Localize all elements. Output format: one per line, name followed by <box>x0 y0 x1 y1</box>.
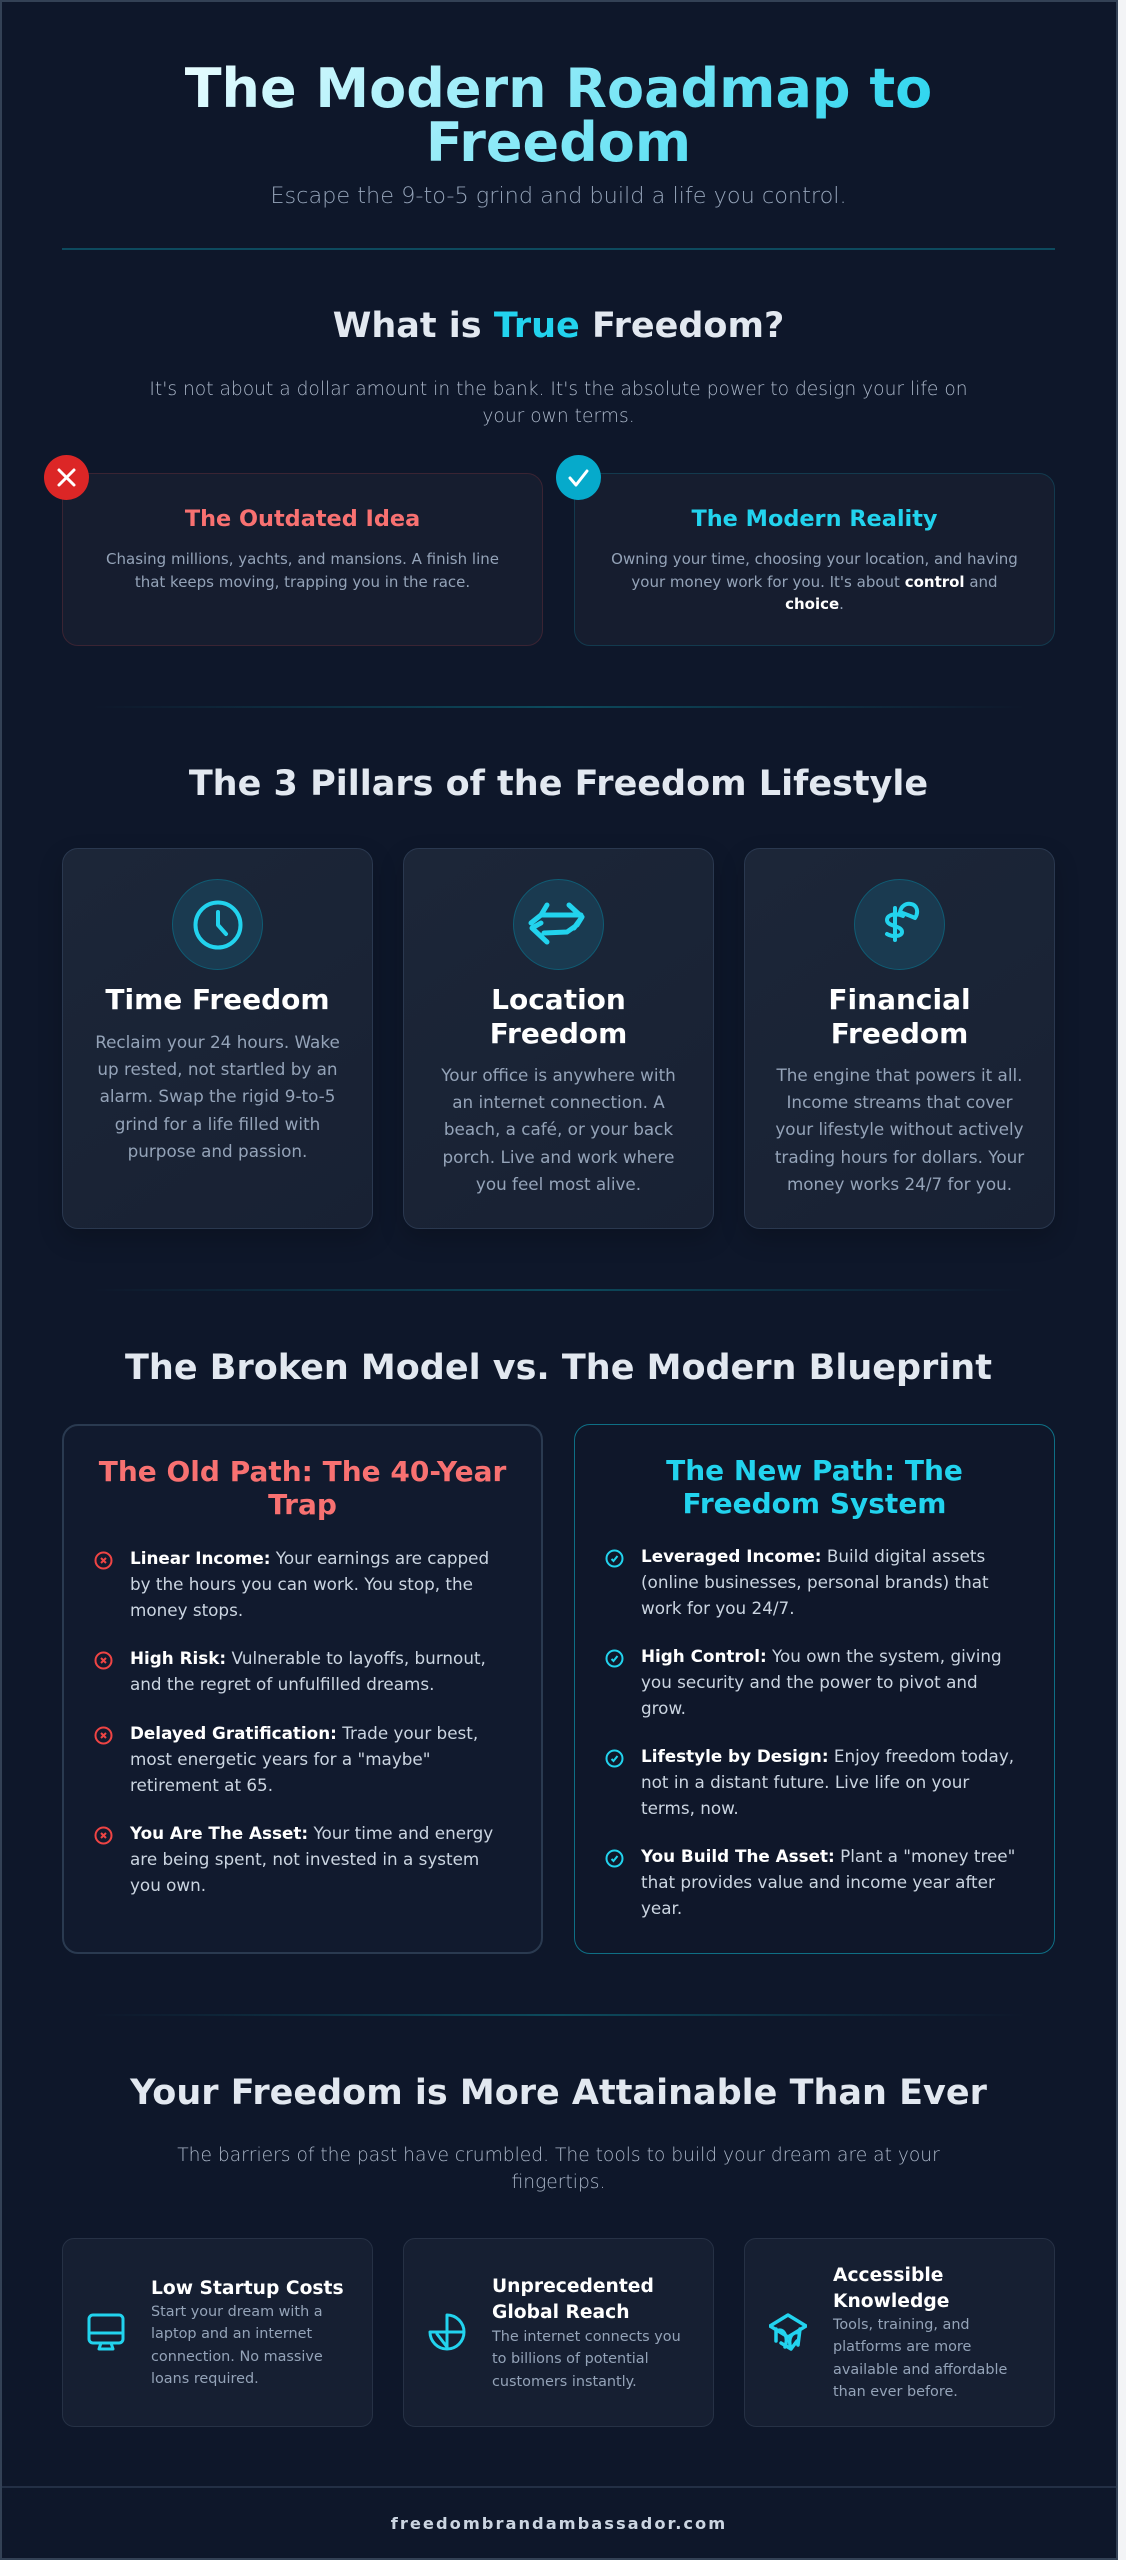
time freedom heading: Time Freedom <box>105 983 330 1016</box>
item: you are the asset <box>94 1823 493 1895</box>
panel: location freedom <box>403 848 714 1229</box>
financial freedom text: trading hours for dollars. Your <box>775 1147 1024 1167</box>
item: delayed gratification: Delayed Gratification: Trade your best, <box>130 1723 478 1743</box>
panel: the new path <box>574 1424 1055 1954</box>
intro text: The barriers of the past have crumbled. The tools to build your dream are at your <box>177 2145 940 2166</box>
location freedom text <box>441 1065 676 1194</box>
accessible knowledge text: available and affordable <box>833 2362 1007 2378</box>
item: you build the asset: year. <box>641 1898 682 1918</box>
subtitle: Escape the 9-to-5 grind and build a life you control. <box>270 183 847 209</box>
global reach heading: Unprecedented <box>492 2276 654 2297</box>
icon: globe <box>428 2314 466 2350</box>
header divider line <box>62 248 1055 250</box>
new path heading: Freedom System <box>683 1487 946 1520</box>
accessible knowledge heading: Accessible <box>833 2265 943 2286</box>
item: you build the asset <box>606 1846 1015 1918</box>
accessible knowledge text: Tools, training, and <box>833 2317 970 2333</box>
location freedom text: porch. Live and work where <box>442 1147 674 1167</box>
item: lifestyle by design: not in a distant future. Live life on your <box>641 1772 969 1792</box>
time freedom text <box>95 1032 340 1161</box>
low startup costs text: loans required. <box>151 2371 259 2387</box>
modern reality text: your money work for you. It's about control and <box>631 572 998 590</box>
item: high control: High Control: You own the system, giving <box>641 1646 1002 1666</box>
modern reality text: Owning your time, choosing your location, and having <box>611 550 1018 568</box>
financial freedom text <box>775 1065 1024 1194</box>
item: delayed gratification: most energetic years for a "maybe" <box>130 1749 430 1769</box>
financial freedom text: Income streams that cover <box>786 1092 1013 1112</box>
item: you are the asset: are being spent, not invested in a system <box>130 1849 479 1869</box>
financial freedom heading <box>828 983 971 1050</box>
outdated idea text <box>106 550 499 590</box>
intro text <box>177 2145 940 2192</box>
global reach text <box>492 2329 681 2390</box>
footer bar <box>2 2486 1116 2560</box>
item: linear income: by the hours you can work. You stop, the <box>130 1574 473 1594</box>
old path heading <box>98 1455 506 1521</box>
panel: the modern reality <box>574 473 1055 646</box>
section divider <box>62 706 1055 708</box>
item: you build the asset: that provides value and income year after <box>641 1872 995 1892</box>
location freedom text: Your office is anywhere with <box>441 1065 676 1085</box>
financial freedom heading: Freedom <box>831 1016 968 1050</box>
item: high control: grow. <box>641 1698 686 1718</box>
intro text: fingertips. <box>512 2172 605 2192</box>
icon: clock <box>172 879 263 970</box>
panel: the old path <box>62 1424 543 1954</box>
accessible knowledge heading <box>833 2265 949 2312</box>
time freedom text: Reclaim your 24 hours. Wake <box>95 1032 340 1052</box>
section divider <box>62 2014 1055 2016</box>
item: high control <box>606 1646 1002 1718</box>
item: high risk <box>94 1648 486 1694</box>
item: leveraged income: Leveraged Income: Build digital assets <box>641 1546 985 1566</box>
panel: global reach <box>403 2238 714 2427</box>
accessible knowledge text <box>832 2317 1007 2400</box>
item: leveraged income <box>606 1546 989 1618</box>
location freedom text: an internet connection. A <box>452 1092 665 1112</box>
new path heading: The New Path: The <box>666 1454 963 1487</box>
title: The Modern Roadmap to <box>185 57 932 120</box>
low startup costs text <box>151 2304 323 2387</box>
intro text: It's not about a dollar amount in the bank. It's the absolute power to design your life on <box>149 379 968 400</box>
item: high risk: and the regret of unfulfilled dreams. <box>130 1674 434 1694</box>
panel: time freedom <box>62 848 373 1229</box>
item: lifestyle by design: Lifestyle by Design: Enjoy freedom today, <box>641 1746 1014 1766</box>
time freedom text: purpose and passion. <box>128 1141 307 1161</box>
item: delayed gratification <box>94 1723 478 1795</box>
location freedom heading: Location <box>491 983 626 1016</box>
old path heading: The Old Path: The 40-Year <box>99 1455 506 1488</box>
old path heading: Trap <box>268 1488 337 1521</box>
icon: red cross badge <box>44 455 89 500</box>
panel: accessible knowledge <box>744 2238 1055 2427</box>
heading: the 3 pillars: The 3 Pillars of the Freedom Lifestyle <box>189 764 928 804</box>
item: linear income: money stops. <box>130 1600 243 1620</box>
heading: broken model vs modern blueprint: The Broken Model vs. The Modern Blueprint <box>125 1348 992 1388</box>
low startup costs text: laptop and an internet <box>151 2326 312 2342</box>
accessible knowledge text: than ever before. <box>833 2384 958 2400</box>
item: lifestyle by design: terms, now. <box>641 1798 739 1818</box>
global reach text: to billions of potential <box>492 2351 649 2367</box>
item: you build the asset: You Build The Asset: Plant a "money tree" <box>641 1846 1015 1866</box>
item: high control: you security and the power to pivot and <box>641 1672 978 1692</box>
title: Freedom <box>426 111 691 174</box>
section divider <box>62 1289 1055 1291</box>
global reach heading <box>492 2276 654 2323</box>
location freedom heading <box>490 983 627 1050</box>
financial freedom heading: Financial <box>828 983 971 1016</box>
panel: low startup costs <box>62 2238 373 2427</box>
item: you are the asset: You Are The Asset: Your time and energy <box>130 1823 493 1843</box>
location freedom heading: Freedom <box>490 1016 627 1050</box>
intro text <box>149 379 968 426</box>
icon: cyan check badge <box>556 455 601 500</box>
icon: graduation cap <box>769 2313 807 2351</box>
icon: dollar sign <box>854 879 945 970</box>
icon: location arrows <box>513 879 604 970</box>
accessible knowledge text: platforms are more <box>833 2339 971 2355</box>
item: high risk: High Risk: Vulnerable to layoffs, burnout, <box>130 1648 486 1668</box>
global reach heading: Global Reach <box>492 2302 630 2323</box>
modern reality text: choice. <box>785 595 844 613</box>
panel: the outdated idea <box>62 473 543 646</box>
financial freedom text: The engine that powers it all. <box>776 1065 1022 1085</box>
heading: what is true freedom: What is True Freedom? <box>333 306 784 346</box>
time freedom text: alarm. Swap the rigid 9-to-5 <box>100 1086 335 1106</box>
item: linear income <box>94 1548 489 1620</box>
item: lifestyle by design <box>606 1746 1014 1818</box>
financial freedom text: money works 24/7 for you. <box>787 1174 1012 1194</box>
outdated idea text: that keeps moving, trapping you in the race. <box>135 572 470 590</box>
new path heading <box>666 1454 963 1520</box>
location freedom text: you feel most alive. <box>476 1174 641 1194</box>
modern reality heading: The Modern Reality <box>691 506 938 532</box>
footer website: freedombrandambassador.com <box>391 2514 727 2533</box>
location freedom text: beach, a café, or your back <box>444 1119 673 1139</box>
item: leveraged income: work for you 24/7. <box>641 1598 795 1618</box>
outdated idea heading: The Outdated Idea <box>185 506 420 532</box>
accessible knowledge heading: Knowledge <box>833 2291 949 2312</box>
title <box>62 62 1055 170</box>
intro text: your own terms. <box>482 406 635 426</box>
modern reality text <box>611 550 1018 613</box>
item: leveraged income: (online businesses, personal brands) that <box>641 1572 989 1592</box>
time freedom text: up rested, not startled by an <box>97 1059 338 1079</box>
outdated idea text: Chasing millions, yachts, and mansions. A finish line <box>106 550 499 568</box>
item: linear income: Linear Income: Your earnings are capped <box>130 1548 489 1568</box>
low startup costs text: connection. No massive <box>151 2349 323 2365</box>
item: delayed gratification: retirement at 65. <box>130 1775 273 1795</box>
item: you are the asset: you own. <box>130 1875 206 1895</box>
financial freedom text: your lifestyle without actively <box>775 1119 1024 1139</box>
icon: monitor <box>88 2314 124 2350</box>
global reach text: The internet connects you <box>492 2329 681 2345</box>
panel: financial freedom <box>744 848 1055 1229</box>
global reach text: customers instantly. <box>492 2374 637 2390</box>
time freedom text: grind for a life filled with <box>115 1114 320 1134</box>
heading: more attainable than ever: Your Freedom is More Attainable Than Ever <box>130 2073 987 2113</box>
low startup costs heading: Low Startup Costs <box>151 2278 344 2299</box>
low startup costs text: Start your dream with a <box>151 2304 323 2320</box>
